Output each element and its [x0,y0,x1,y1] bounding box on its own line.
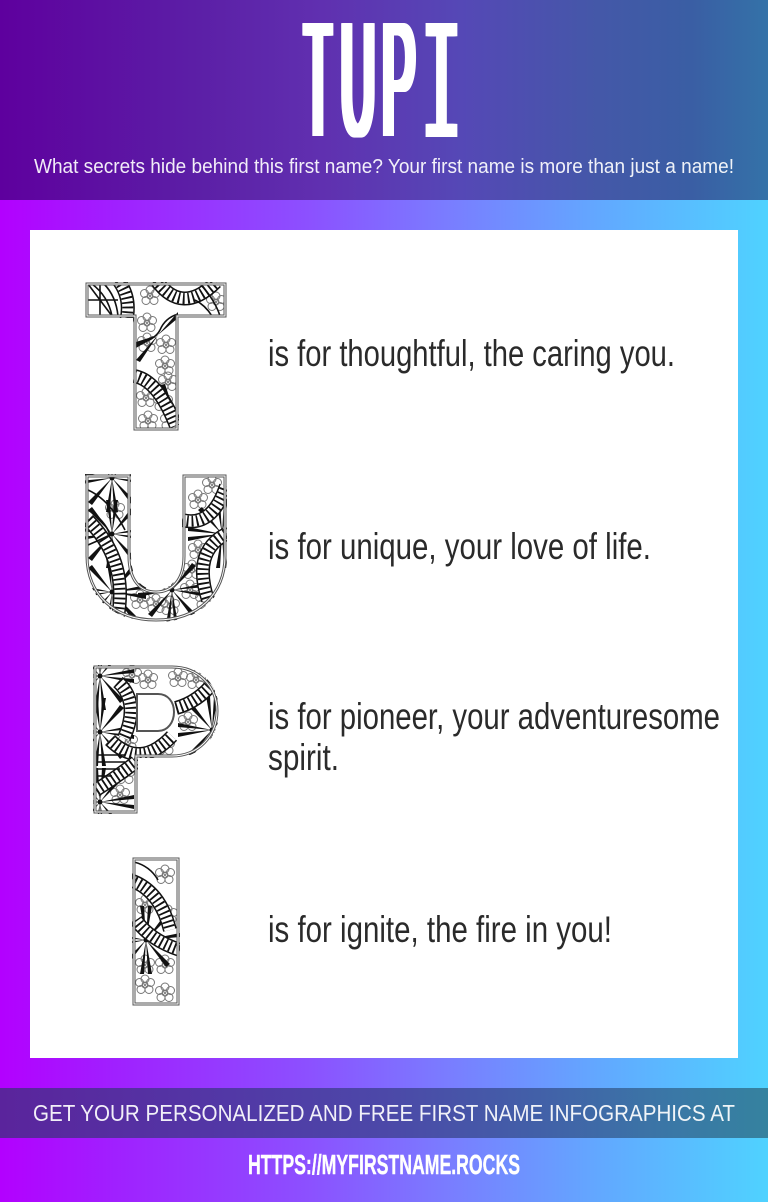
line: P: spirit. [268,737,339,778]
header band [0,0,768,200]
icon: letter I [132,858,180,1006]
icon: letter U [85,474,227,622]
icon: letter T [87,280,226,430]
page graphics and text [34,158,734,1175]
title [302,0,462,188]
footer band [0,1088,768,1138]
line: I: is for ignite, the fire in you! [268,909,612,950]
white card [30,230,738,1058]
footer url: HTTPS://MYFIRSTNAME.ROCKS [248,1149,520,1180]
line: U: is for unique, your love of life. [268,526,651,567]
icon: letter P [93,665,218,814]
line: P [268,696,720,778]
subtitle: What secrets hide behind this first name? Your first name is more than just a name! [34,156,734,178]
